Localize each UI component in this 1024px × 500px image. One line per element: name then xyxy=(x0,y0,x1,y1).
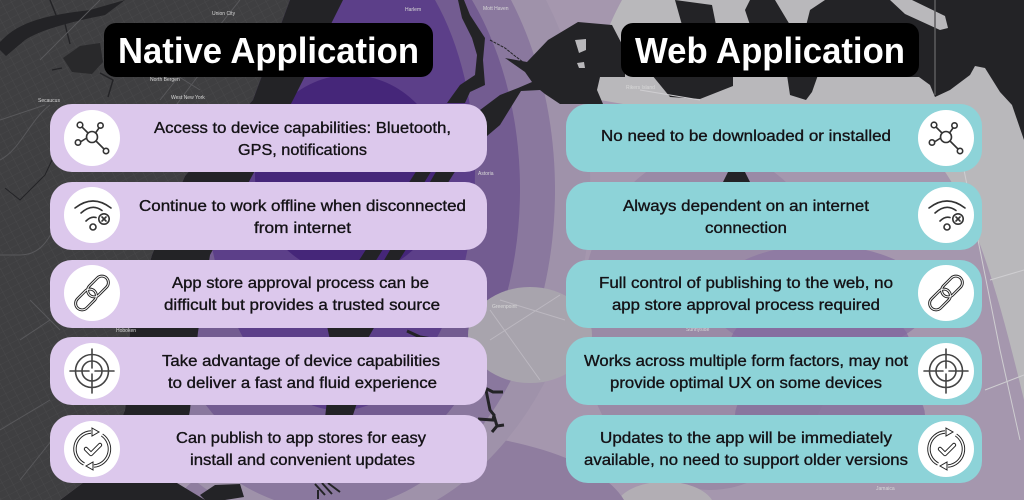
card: immediate updates xyxy=(566,415,982,483)
text: app store approval: difficult but provides a trusted source xyxy=(164,297,440,314)
text: immediate updates: Updates to the app will be immediately xyxy=(600,430,892,447)
panel: native application xyxy=(50,23,487,483)
text: device capabilities xyxy=(154,120,451,159)
text: internet dependence xyxy=(623,198,870,237)
text: form factors xyxy=(584,353,909,392)
icon: chain link xyxy=(927,273,965,313)
text: publishing control xyxy=(599,275,893,314)
icon: sync check xyxy=(929,428,963,470)
card: app store approval xyxy=(50,260,487,328)
text: immediate updates: available, no need to support older versions xyxy=(584,452,908,469)
text: publishing xyxy=(176,430,426,469)
map place labels: Greenpoint xyxy=(492,304,517,310)
text: fast experience xyxy=(162,353,440,392)
text: publishing control: app store approval process required xyxy=(612,297,880,314)
text: fast experience: to deliver a fast and fluid experience xyxy=(168,375,437,392)
map place labels: Hoboken xyxy=(116,328,136,334)
text: immediate updates xyxy=(584,430,908,469)
text: publishing control: Full control of publishing to the web, no xyxy=(599,275,893,292)
text: device capabilities: Access to device capabilities: Bluetooth, xyxy=(154,120,451,137)
text: no install: No need to be downloaded or installed xyxy=(601,128,891,145)
panel: web application xyxy=(566,23,982,483)
icon: sync check xyxy=(75,428,109,470)
text: device capabilities: GPS, notifications xyxy=(238,142,367,159)
heading: Native Application: Native Application xyxy=(118,30,419,71)
map place labels: Sunnyside xyxy=(686,327,710,333)
card: no install xyxy=(566,104,982,172)
card: fast experience xyxy=(50,337,487,405)
icon: network nodes xyxy=(75,122,109,154)
card: device capabilities xyxy=(50,104,487,172)
map place labels: Rikers Island xyxy=(626,85,655,91)
text: form factors: Works across multiple form factors, may not xyxy=(584,353,909,370)
text: publishing: Can publish to app stores for easy xyxy=(176,430,426,447)
text: offline xyxy=(139,198,466,237)
text: offline: Continue to work offline when disconnected xyxy=(139,198,466,215)
text: app store approval: App store approval process can be xyxy=(172,275,429,292)
icon: chain link xyxy=(73,273,111,313)
text: internet dependence: Always dependent on an internet xyxy=(623,198,870,215)
text: fast experience: Take advantage of device capabilities xyxy=(162,353,440,370)
text: app store approval xyxy=(164,275,440,314)
card: form factors xyxy=(566,337,982,405)
map place labels: North Bergen xyxy=(150,77,180,83)
map place labels: Harlem xyxy=(405,7,421,13)
card: publishing xyxy=(50,415,487,483)
heading: Web Application: Web Application xyxy=(635,30,905,71)
text: internet dependence: connection xyxy=(705,220,787,237)
text: offline: from internet xyxy=(254,220,352,237)
map place labels: Secaucus xyxy=(38,98,60,104)
map place labels: Jamaica xyxy=(876,486,895,492)
map place labels: Union City xyxy=(212,11,236,17)
map place labels: Mott Haven xyxy=(483,6,509,12)
icon: target xyxy=(924,349,968,393)
icon: wifi off xyxy=(929,201,965,230)
text: form factors: provide optimal UX on some devices xyxy=(610,375,882,392)
map place labels: West New York xyxy=(171,95,205,101)
card: offline xyxy=(50,182,487,250)
card: internet dependence xyxy=(566,182,982,250)
icon: network nodes xyxy=(929,122,963,154)
map place labels: Astoria xyxy=(478,171,494,177)
icon: wifi off xyxy=(75,201,111,230)
card: publishing control xyxy=(566,260,982,328)
text: publishing: install and convenient updates xyxy=(190,452,415,469)
icon: target xyxy=(70,349,114,393)
